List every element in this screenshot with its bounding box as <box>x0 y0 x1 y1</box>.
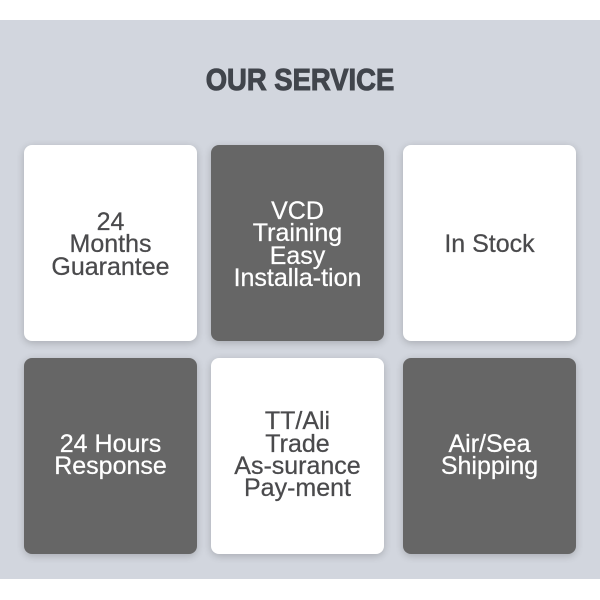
card: VCD Training Easy Installation: VCD <box>271 197 324 225</box>
card: 24 Months Guarantee: Guarantee <box>51 253 170 281</box>
card: Air/Sea Shipping: Shipping <box>441 452 538 480</box>
card: In Stock: In Stock <box>444 230 535 258</box>
card: Air/Sea Shipping: Air/Sea <box>448 430 530 458</box>
card: Air/Sea Shipping <box>403 358 576 554</box>
card: VCD Training Easy Installation: Easy <box>270 242 325 270</box>
card: TT/Ali Trade Assurance Payment: Pay-ment <box>244 474 351 502</box>
card: VCD Training Easy Installation: Training <box>253 219 342 247</box>
card: TT/Ali Trade Assurance Payment <box>211 358 384 554</box>
card: 24 Months Guarantee <box>24 145 197 341</box>
title: OUR SERVICE <box>206 62 394 97</box>
card: 24 Months Guarantee: 24 <box>97 208 124 236</box>
card: 24 Hours Response: 24 Hours <box>60 430 161 458</box>
card: 24 Months Guarantee: Months <box>70 230 151 258</box>
card: In Stock <box>403 145 576 341</box>
card: VCD Training Easy Installation <box>211 145 384 341</box>
card: TT/Ali Trade Assurance Payment: Trade <box>265 430 330 458</box>
card: 24 Hours Response <box>24 358 197 554</box>
card: 24 Hours Response: Response <box>54 452 167 480</box>
card: TT/Ali Trade Assurance Payment: As-surance <box>234 452 361 480</box>
card: TT/Ali Trade Assurance Payment: TT/Ali <box>265 407 330 435</box>
card: VCD Training Easy Installation: Installa-tion <box>234 264 361 292</box>
